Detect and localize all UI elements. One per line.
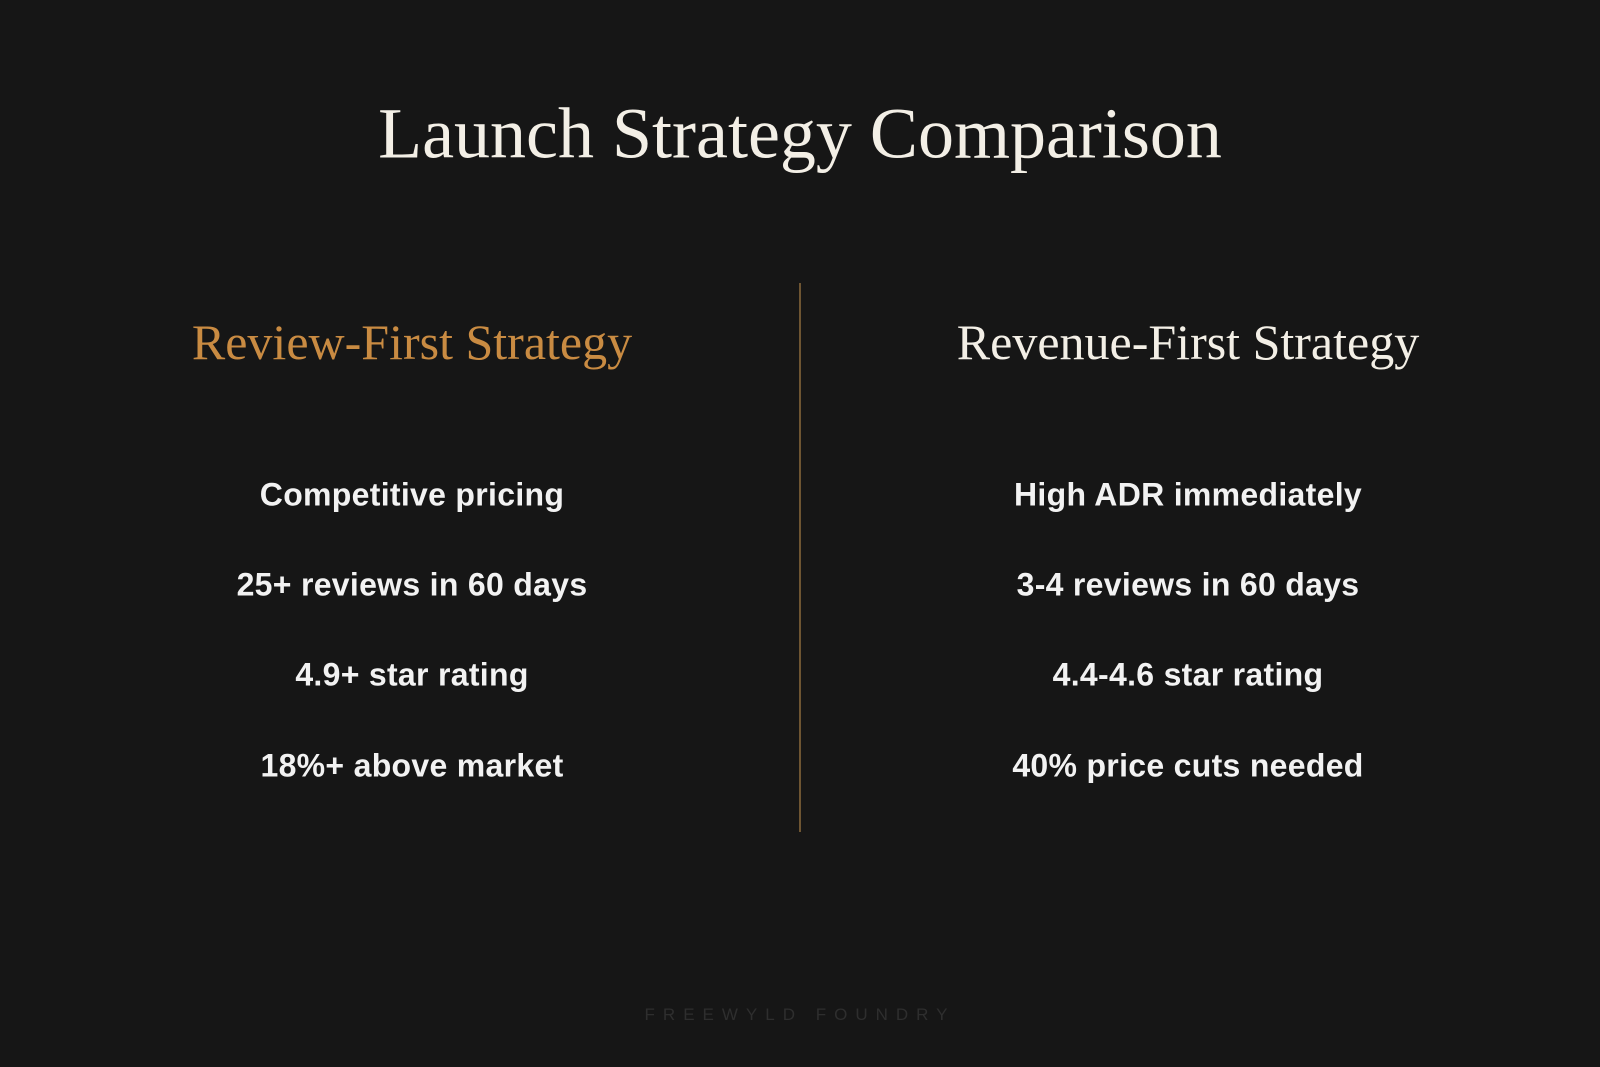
item: High ADR immediately bbox=[1014, 476, 1362, 512]
item: 3-4 reviews in 60 days bbox=[1017, 566, 1359, 602]
title: Launch Strategy Comparison bbox=[378, 94, 1222, 174]
item: 40% price cuts needed bbox=[1012, 748, 1364, 784]
item: 18%+ above market bbox=[260, 748, 564, 784]
item: 4.9+ star rating bbox=[295, 656, 529, 692]
panel: revenue-first bbox=[957, 314, 1420, 784]
panel: review-first bbox=[192, 314, 632, 784]
heading: revenue-first: Revenue-First Strategy bbox=[957, 314, 1419, 370]
item: Competitive pricing bbox=[260, 476, 564, 512]
heading: review-first: Review-First Strategy bbox=[192, 314, 632, 370]
footer: FREEWYLD FOUNDRY bbox=[645, 1005, 955, 1024]
divider bbox=[799, 283, 801, 832]
item: 4.4-4.6 star rating bbox=[1053, 656, 1323, 692]
item: 25+ reviews in 60 days bbox=[237, 566, 587, 602]
